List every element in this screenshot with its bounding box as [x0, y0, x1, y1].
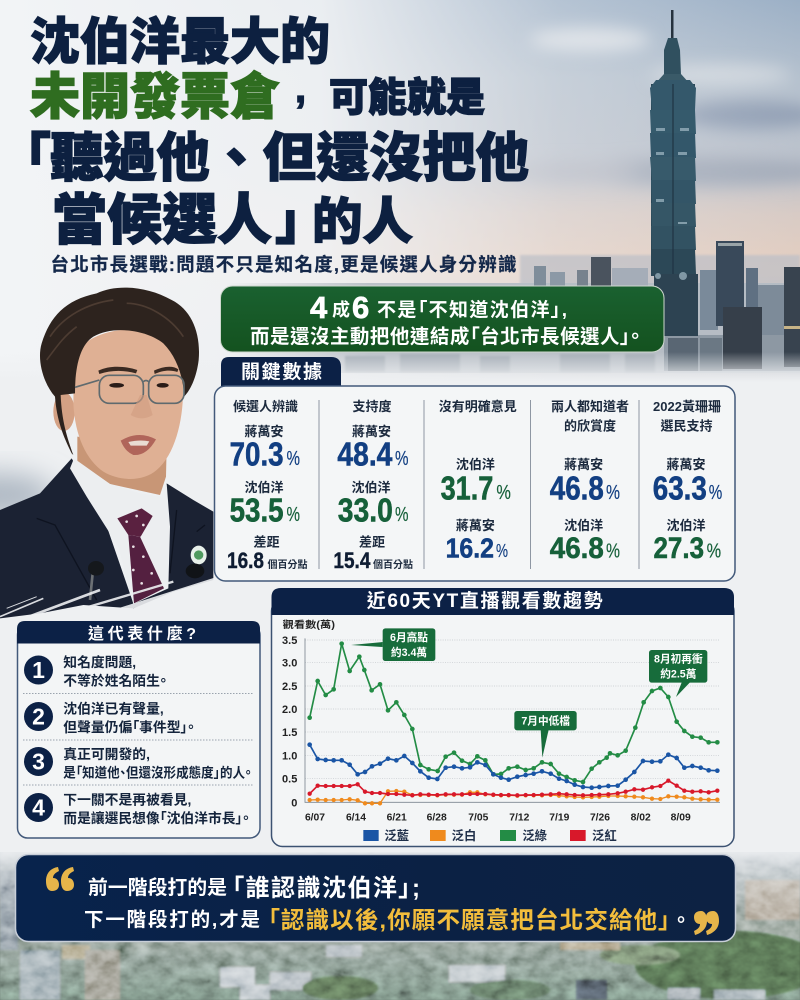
title: , [295, 67, 306, 111]
photo: portrait of Shen Po-yang [0, 288, 214, 618]
title: 未開發票倉 [30, 69, 280, 125]
legend: 泛綠 [522, 828, 547, 843]
callout: early August rebound: 8月初再衝 [654, 653, 703, 666]
item 4 [24, 792, 249, 826]
y axis labels: 觀看數(萬) [283, 619, 335, 631]
y axis labels: 2.0 [282, 704, 297, 716]
first quote line: 前一階段打的是 [88, 876, 227, 899]
column: favourability among those who know both: 46.8 [550, 470, 604, 506]
neck [77, 437, 167, 495]
column: support: 支持度 [352, 399, 392, 414]
item 1: 知名度問題, [63, 654, 136, 670]
ear [53, 392, 75, 431]
brush strokes [0, 578, 220, 620]
panel: key data [214, 357, 735, 581]
column: support: 蔣萬安 [352, 424, 391, 439]
x axis labels: 7/12 [509, 812, 530, 823]
column: 2022 Huang Shan-shan voters: 2022黃珊珊 [653, 399, 721, 414]
callout: mid-July low [514, 711, 577, 758]
title [0, 14, 529, 251]
item 1: 不等於姓名陌生。 [63, 672, 167, 688]
x axis labels: 8/02 [631, 812, 651, 823]
green callout banner: 成 [332, 299, 350, 320]
panel: what this means [17, 621, 260, 838]
item 3: 3 [32, 748, 45, 774]
y axis labels: 1.0 [282, 750, 297, 762]
callout: June peak: 約3.4萬 [391, 646, 427, 659]
title: 「 [0, 130, 51, 188]
glasses [75, 375, 184, 403]
second quote line: 。 [671, 910, 691, 932]
column: support [333, 399, 413, 573]
column: candidate recognition: 蔣萬安 [244, 424, 284, 439]
hair [40, 288, 199, 455]
column: favourability among those who know both: 46.8 [550, 532, 604, 565]
column: 2022 Huang Shan-shan voters: 蔣萬安 [666, 457, 706, 472]
panel: YouTube live view trend chart [272, 588, 734, 846]
y axis labels: 1.5 [282, 727, 297, 739]
series: orange [310, 791, 717, 803]
y axis labels: 0 [291, 797, 297, 809]
title: 的人 [312, 194, 413, 250]
column: 2022 Huang Shan-shan voters: 27.3 [654, 532, 704, 565]
y axis labels: 3.5 [282, 635, 297, 647]
column: support: 33.0 [338, 492, 393, 528]
column: candidate recognition: 70.3 [230, 436, 284, 472]
y axis labels: 3.0 [282, 658, 297, 670]
column: no clear opinion: % [496, 482, 511, 504]
callout: June peak: 6月高點 [390, 631, 428, 644]
x axis labels: 7/19 [549, 812, 570, 823]
item 2: 但聲量仍偏「事件型」。 [63, 719, 194, 735]
nose [131, 395, 153, 418]
item 3: 真正可開發的, [63, 746, 150, 762]
title: 沈伯洋最大的 [30, 14, 330, 70]
eyebrows [98, 367, 137, 374]
subtitle: 台北市長選戰:問題不只是知名度,更是候選人身分辨識 [50, 254, 516, 275]
green callout banner: 不是「不知道沈伯洋」, [377, 299, 567, 321]
column: support: 差距 [359, 534, 385, 550]
column: candidate recognition: % [286, 448, 300, 470]
item 2: 沈伯洋已有聲量, [63, 700, 164, 716]
suit [0, 458, 213, 618]
series: blue [310, 745, 717, 788]
panel heading [17, 621, 260, 644]
quote banner [16, 854, 736, 942]
title: 可能就是 [329, 76, 485, 120]
first quote line [88, 875, 420, 902]
microphones [90, 573, 93, 600]
column: favourability among those who know both: 的欣賞度 [564, 418, 616, 434]
eyes [109, 383, 124, 388]
column: no clear opinion: 蔣萬安 [456, 518, 495, 533]
icon: Taipei 101 tower [650, 10, 698, 336]
column: candidate recognition: 沈伯洋 [244, 480, 284, 495]
background: lower city view [0, 848, 800, 1000]
column: no clear opinion: 沈伯洋 [456, 457, 495, 472]
column: support: 48.4 [337, 436, 393, 472]
first quote line: 「誰認識沈伯洋」; [232, 875, 420, 902]
series: green [310, 644, 717, 782]
column: support: % [395, 504, 409, 526]
item 4: 4 [32, 794, 45, 820]
column: support: % [395, 448, 409, 470]
column: no clear opinion: 16.2 [446, 532, 494, 564]
second quote line [84, 906, 691, 933]
column: no clear opinion [439, 399, 517, 564]
legend: 泛紅 [592, 828, 617, 843]
y axis labels: 2.5 [282, 681, 297, 693]
column: 2022 Huang Shan-shan voters: % [709, 482, 722, 504]
column: candidate recognition: 16.8 [227, 548, 264, 573]
series: red [310, 781, 717, 795]
column: no clear opinion: 沒有明確意見 [439, 399, 517, 414]
x axis labels: 6/14 [346, 812, 366, 823]
title: 聽過他、但還沒把他 [50, 129, 529, 188]
column: favourability among those who know both: 蔣萬安 [564, 457, 603, 472]
column: support: 個百分點 [373, 558, 413, 571]
x axis labels [305, 812, 691, 823]
callout: June peak [351, 628, 435, 661]
background: fog band [0, 352, 800, 382]
column: 2022 Huang Shan-shan voters: % [707, 540, 721, 562]
y axis labels [282, 619, 335, 809]
title: 」 [275, 193, 327, 251]
item 3: 是「知道他、但還沒形成態度」的人。 [63, 764, 251, 780]
shirt [70, 458, 170, 604]
second quote line: 「認識以後,你願不願意把台北交給他」 [268, 906, 670, 933]
column: 2022 Huang Shan-shan voters: 63.3 [653, 470, 707, 506]
green callout banner [220, 286, 664, 352]
callout: early August rebound [649, 650, 707, 697]
item 2: 2 [32, 704, 45, 730]
callout: early August rebound: 約2.5萬 [660, 668, 697, 681]
x axis labels: 6/21 [387, 812, 407, 823]
column: favourability among those who know both: 兩人都知道者 [551, 399, 629, 414]
column: candidate recognition: 個百分點 [268, 558, 308, 571]
icon: closing quotation mark [694, 911, 719, 935]
item 1 [24, 654, 167, 688]
column: favourability among those who know both [550, 399, 629, 565]
second quote line: 下一階段打的,才是 [84, 908, 260, 931]
item 4: 而是讓選民想像「沈伯洋市長」。 [63, 810, 249, 826]
column: candidate recognition: 53.5 [230, 492, 284, 528]
chart heading [272, 588, 734, 615]
item 4: 下一關不是再被看見, [63, 792, 191, 808]
column: support: 沈伯洋 [351, 480, 391, 495]
tie [117, 508, 153, 537]
item 1: 1 [32, 657, 45, 683]
legend [363, 828, 617, 843]
callout: mid-July low: 7月中低檔 [521, 714, 570, 727]
x axis labels: 7/26 [590, 812, 610, 823]
panel tab heading: 關鍵數據 [241, 360, 322, 383]
mouth [121, 435, 156, 455]
column: favourability among those who know both: % [606, 540, 620, 562]
line chart [282, 619, 720, 843]
x axis labels: 7/05 [468, 812, 489, 823]
title: 當候選人 [52, 189, 272, 251]
x axis labels: 6/07 [305, 812, 325, 823]
green callout banner: 4 [310, 290, 328, 325]
icon: opening quotation mark [46, 867, 74, 891]
column: support: 15.4 [333, 548, 371, 573]
x axis labels: 8/09 [671, 812, 691, 823]
face [73, 329, 183, 479]
green callout banner: 6 [352, 290, 369, 325]
column: candidate recognition: % [286, 504, 300, 526]
background: skyline towers right of Taipei 101 [668, 241, 800, 371]
green callout banner: 而是還沒主動把他連結成「台北市長候選人」。 [250, 325, 640, 348]
column: no clear opinion: % [496, 541, 508, 561]
column: no clear opinion: 31.7 [441, 470, 493, 506]
pin [191, 546, 207, 564]
column: candidate recognition [227, 399, 308, 573]
item 2 [24, 700, 194, 735]
x axis labels: 6/28 [427, 812, 447, 823]
legend: 泛藍 [384, 828, 409, 843]
item 3 [24, 746, 251, 780]
column: 2022 Huang Shan-shan voters: 沈伯洋 [666, 518, 706, 533]
y axis labels: 0.5 [282, 774, 297, 786]
chart heading: 近60天YT直播觀看數趨勢 [367, 589, 603, 612]
panel heading: 這代表什麼? [88, 624, 196, 643]
column: favourability among those who know both: % [606, 482, 620, 504]
column: candidate recognition: 差距 [253, 534, 280, 550]
column: 2022 Huang Shan-shan voters: 選民支持 [660, 418, 713, 434]
panel tab heading [221, 357, 341, 386]
column: 2022 Huang Shan-shan voters [653, 399, 722, 565]
column: favourability among those who know both: 沈伯洋 [564, 518, 603, 533]
column: candidate recognition: 候選人辨識 [233, 399, 298, 414]
legend: 泛白 [452, 828, 476, 843]
